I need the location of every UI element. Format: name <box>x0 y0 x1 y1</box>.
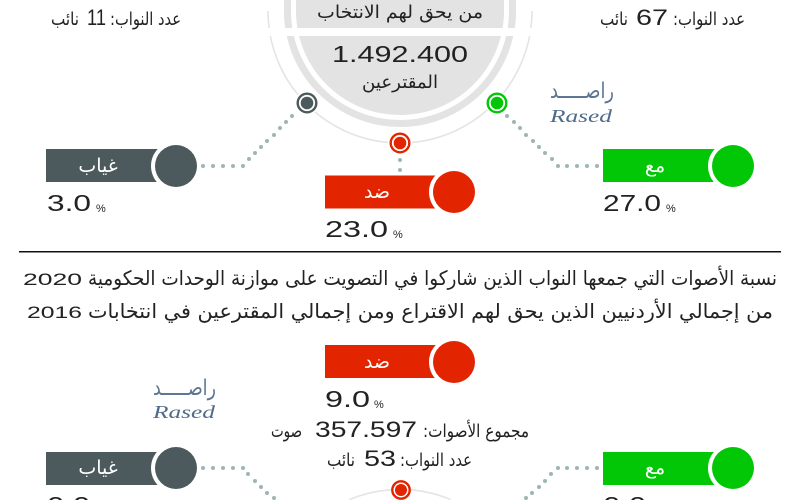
label: in favour bottom <box>603 443 758 493</box>
heading: share of votes: 2020 <box>23 270 82 289</box>
total votes: 357.597 <box>315 417 417 442</box>
connector: absent top <box>201 114 294 168</box>
total votes: صوت <box>271 421 302 442</box>
node: against top <box>388 131 412 155</box>
label: absent bottom <box>46 443 201 493</box>
label: against 23.0%: % <box>393 229 403 241</box>
deputies count right: in favour: 67 <box>636 5 668 30</box>
node: in favour top <box>485 91 509 115</box>
top circle: eligible voters and voters <box>262 0 538 143</box>
node: absent top <box>295 91 319 115</box>
top circle: eligible voters and voters: المقترعين <box>362 72 438 93</box>
label: against 23.0%: 23.0 <box>325 216 388 242</box>
label: absent 3.0%: % <box>96 203 106 215</box>
heading: share of votes <box>23 266 777 324</box>
deputies count left: absent: نائب <box>51 9 79 30</box>
top circle: eligible voters and voters: 1.492.400 <box>332 41 468 67</box>
Rased logo bottom: راصـــــد <box>153 376 216 401</box>
label: against 9.0% <box>325 337 479 412</box>
total votes: مجموع الأصوات:‏ <box>423 420 529 442</box>
connector: absent bottom <box>201 466 276 500</box>
deputies count left: absent: عدد النواب:‏ <box>110 9 181 30</box>
deputies count centre: against <box>327 446 472 471</box>
deputies count right: in favour <box>600 5 745 30</box>
top circle: eligible voters and voters: من يحق لهم الانتخاب <box>317 2 483 23</box>
label: in favour 27.0%: مع <box>645 155 665 177</box>
deputies count left: absent: 11 <box>87 5 106 30</box>
deputies count centre: against: عدد النواب:‏ <box>400 450 472 471</box>
label: in favour bottom: مع <box>645 457 665 479</box>
label: absent 3.0%: 3.0 <box>47 190 91 216</box>
label: against 23.0%: ضد <box>364 181 390 203</box>
heading: share of votes: 2016 <box>27 303 82 322</box>
label: in favour 27.0%: 27.0 <box>603 190 661 216</box>
label: against 9.0%: 9.0 <box>325 386 370 412</box>
bottom circle outline <box>350 489 450 500</box>
label: absent bottom: غياب <box>78 457 118 479</box>
label: in favour 27.0% <box>603 141 758 216</box>
deputies count right: in favour: نائب <box>600 9 628 30</box>
label: in favour 27.0%: % <box>666 203 676 215</box>
Rased logo top: راصـــــد <box>550 79 614 104</box>
Rased logo bottom: Rased <box>152 402 216 422</box>
node: against bottom <box>391 480 411 500</box>
Rased logo top: Rased <box>549 106 613 126</box>
connector: in favour bottom <box>524 466 599 500</box>
deputies count left: absent <box>51 5 181 30</box>
label: absent 3.0%: غياب <box>78 155 118 177</box>
label: absent 3.0% <box>46 141 201 216</box>
deputies count centre: against: نائب <box>327 450 355 471</box>
label: against 9.0%: ضد <box>364 351 390 373</box>
deputies count centre: against: 53 <box>364 446 396 471</box>
connector: in favour top <box>505 114 599 168</box>
Rased logo bottom <box>152 376 216 422</box>
label: against 9.0%: % <box>374 399 384 411</box>
label: against 23.0% <box>325 167 479 242</box>
connector: against top <box>398 158 402 172</box>
Rased logo top <box>549 79 614 126</box>
heading: share of votes: من إجمالي الأردنيين الذين يحق لهم الاقتراع ومن إجمالي المقترعين في انتخابات <box>88 299 773 324</box>
total votes <box>271 417 529 442</box>
deputies count right: in favour: عدد النواب:‏ <box>673 9 745 30</box>
